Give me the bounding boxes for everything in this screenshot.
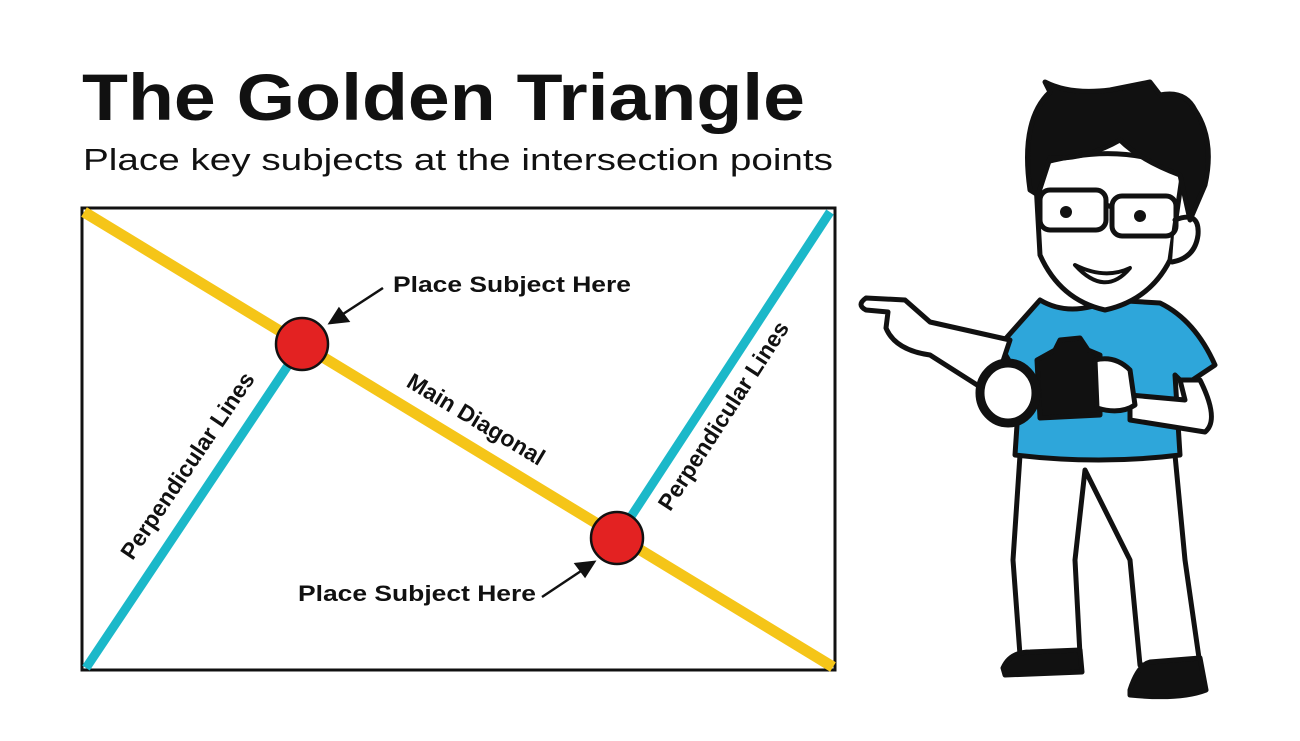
right arm: [1130, 380, 1211, 432]
perpendicular line right: [617, 212, 830, 538]
intersection point 1: [276, 318, 328, 370]
shoes: [1003, 650, 1082, 675]
hair: [1028, 82, 1208, 220]
camera lens: [980, 363, 1036, 423]
face: [1035, 154, 1183, 310]
label: main diagonal: Main Diagonal: [403, 368, 550, 470]
shirt: [1000, 300, 1215, 460]
hand on camera: [1095, 359, 1135, 411]
perpendicular line left: [86, 343, 303, 668]
arrow 2: [542, 562, 594, 597]
label: place subject here 1: Place Subject Here: [393, 272, 631, 297]
illustration: photographer: [861, 82, 1215, 697]
subtitle: Place key subjects at the intersection points: [83, 142, 833, 177]
pointing arm: [861, 298, 1010, 390]
pants: [1013, 455, 1200, 665]
eyes: [1060, 206, 1072, 218]
main diagonal line: [84, 212, 833, 667]
camera body: [1037, 338, 1100, 418]
label: perpendicular lines left: Perpendicular Lines: [115, 367, 260, 564]
panel: diagram: [82, 208, 835, 670]
label: place subject here 2: Place Subject Here: [298, 581, 536, 606]
label: perpendicular lines right: Perpendicular Lines: [653, 316, 794, 515]
intersection point 2: [591, 512, 643, 564]
title: The Golden Triangle: [82, 60, 805, 134]
arrow 1: [330, 288, 383, 323]
glasses: [1040, 190, 1176, 236]
ear: [1172, 217, 1198, 262]
smile: [1075, 265, 1130, 282]
